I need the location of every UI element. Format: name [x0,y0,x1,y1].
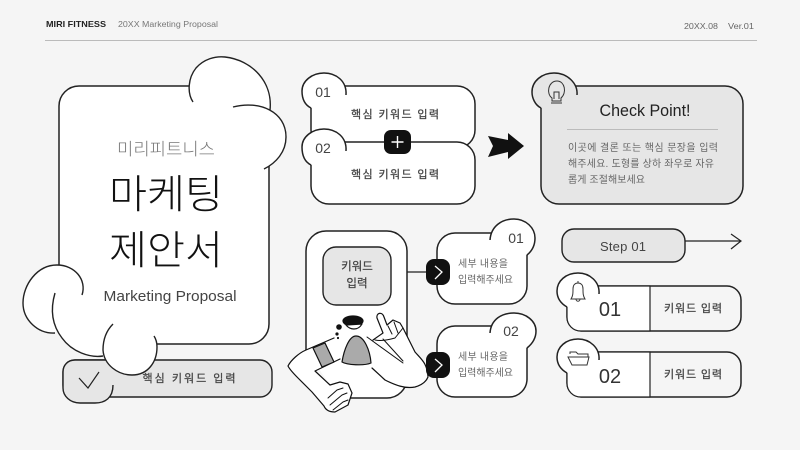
panel: phone frame: 키워드 [341,260,373,273]
header [45,19,757,40]
panel: keyword 01: 01 [315,84,331,100]
panel: main title card: 미리피트니스 [117,140,215,159]
panel: row 01: 01 [599,299,621,321]
panel: check point: 해주세요. 도형를 상하 좌우로 자유 [568,157,714,170]
panel: keyword 02 [302,129,475,204]
header: Ver.01 [728,21,754,31]
panel: detail 01: 입력해주세요 [458,273,513,286]
icon: bell [571,281,585,301]
header: MIRI FITNESS [46,19,106,29]
panel: row 02: 02 [599,366,621,388]
panel: detail 01: 01 [508,230,524,246]
icon: folder [568,352,589,365]
panel: main title card [23,57,286,375]
panel: row 02: 키워드 입력 [664,368,722,381]
panel: detail 02: 02 [503,323,519,339]
panel: row 01 [557,273,741,331]
panel: main title card: 마케팅 [109,173,223,217]
header: 20XX Marketing Proposal [118,20,218,29]
illustration: person pointing [288,313,428,412]
panel: keyword 01 [302,73,475,148]
arrow: step arrow [685,234,741,249]
panel: check point: 이곳에 결론 또는 핵심 문장을 입력 [568,141,718,154]
panel: keyword 02: 02 [315,140,331,156]
icon: chevron 02 [426,352,450,378]
panel: checked keyword pill [63,360,272,403]
panel: step [562,229,741,262]
panel: keyword 02: 핵심 키워드 입력 [351,168,439,181]
panel: detail 02: 입력해주세요 [458,366,513,379]
panel: check point [532,73,743,204]
panel: check point: 롭게 조절해보세요 [568,173,645,186]
panel: detail 02: 세부 내용을 [458,351,508,363]
panel: check point: Check Point! [600,102,690,120]
icon: plus [384,130,411,154]
icon: chevron 01 [426,259,450,285]
panel: row 01: 키워드 입력 [664,302,722,315]
panel: keyword 01: 핵심 키워드 입력 [351,108,439,121]
panel: main title card: 제안서 [109,229,223,273]
panel: phone frame [306,231,407,398]
panel: detail 02 [437,313,536,397]
panel: row 02 [557,339,741,397]
panel: phone frame: 입력 [346,277,368,290]
panel: detail 01: 세부 내용을 [458,258,508,270]
icon: light bulb [549,81,564,103]
panel: main title card: Marketing Proposal [104,289,236,305]
arrow: black arrow [488,133,524,159]
panel: detail 01 [407,219,535,304]
panel: checked keyword pill: 핵심 키워드 입력 [142,372,236,385]
header: 20XX.08 [684,21,718,31]
panel: step: Step 01 [600,239,646,254]
